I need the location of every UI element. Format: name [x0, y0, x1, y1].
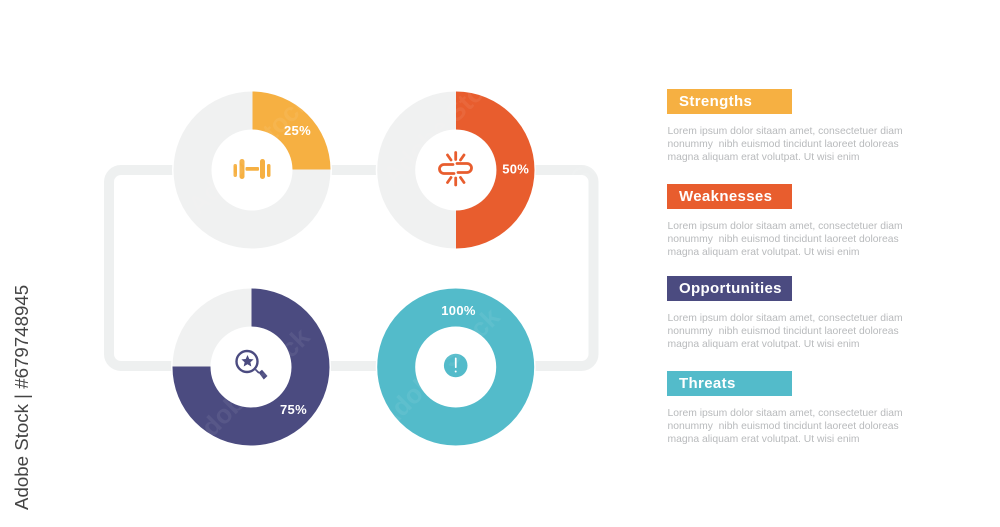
text block: Opportunities: Lorem ipsum dolor sitaam amet, consectetuer diam nonummy nibh euismod tincidunt laoreet doloreas magna aliquam erat volutpat. Ut wisi enim [668, 312, 903, 350]
heading: Weaknesses: Weaknesses [679, 188, 772, 205]
connector loop [109, 170, 594, 366]
donut: strengths 25% [172, 90, 332, 250]
text block: Weaknesses: Lorem ipsum dolor sitaam amet, consectetuer diam nonummy nibh euismod tincidunt laoreet doloreas magna aliquam erat volutpat. Ut wisi enim [668, 220, 903, 258]
heading: Strengths [667, 89, 792, 114]
heading: Strengths: Strengths [679, 93, 752, 110]
watermark [182, 56, 636, 455]
heading: Threats [667, 371, 792, 396]
icon: magnifier with star [236, 351, 268, 380]
heading: Opportunities [667, 276, 792, 301]
watermark: Adobe Stock [372, 301, 506, 435]
watermark: Adobe Stock [502, 121, 636, 255]
donut: threats 100% [376, 287, 536, 447]
label: 100%: 100% [441, 303, 476, 318]
text block: Threats: Lorem ipsum dolor sitaam amet, consectetuer diam nonummy nibh euismod tincidunt laoreet doloreas magna aliquam erat volutpat. Ut wisi enim [668, 408, 903, 445]
icon: exclamation badge [444, 354, 468, 377]
icon: dumbbell [234, 159, 270, 179]
heading: Weaknesses [667, 184, 792, 209]
heading: Opportunities: Opportunities [679, 280, 782, 297]
heading: Threats: Threats [679, 375, 736, 392]
icon: broken chain link [440, 152, 472, 185]
watermark: Adobe Stock [182, 321, 316, 455]
label: 50%: 50% [502, 162, 529, 176]
text block: Strengths: Lorem ipsum dolor sitaam amet, consectetuer diam nonummy nibh euismod tincidunt laoreet doloreas magna aliquam erat volutpat. Ut wisi enim [668, 126, 903, 163]
donut: opportunities 75% [171, 287, 331, 447]
watermark: Adobe Stock [182, 86, 316, 220]
label: 25%: 25% [284, 123, 311, 138]
donut: weaknesses 50% [376, 90, 536, 250]
stock credit: Adobe Stock | #679748945 [11, 284, 32, 510]
label: 75%: 75% [280, 402, 307, 417]
watermark: Adobe Stock [377, 56, 511, 190]
